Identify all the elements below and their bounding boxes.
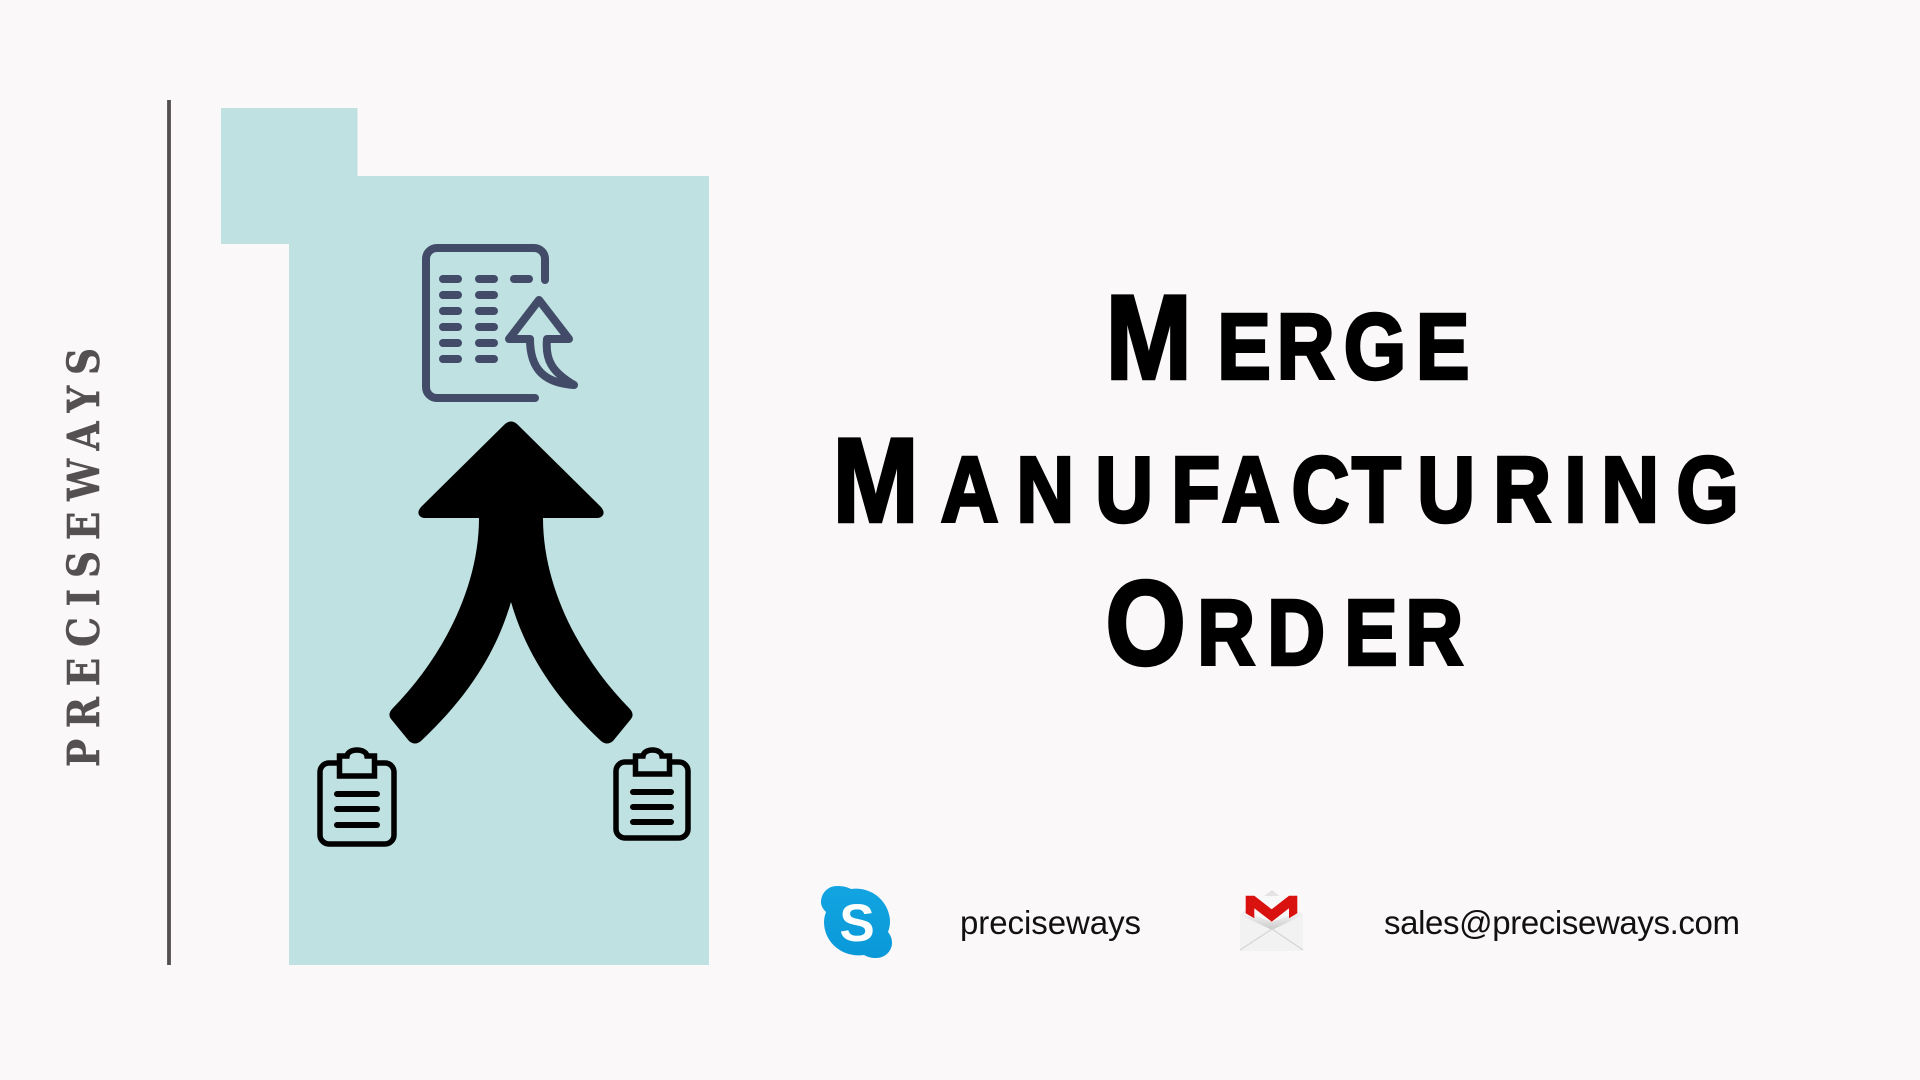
title: Merge Manufacturing Order: M	[833, 413, 919, 547]
icon: merging arrow	[389, 422, 633, 744]
title: Merge Manufacturing Order: M	[1106, 270, 1192, 404]
title: Merge Manufacturing Order: RDER	[1197, 581, 1463, 685]
contact: Skype handle: preciseways	[960, 904, 1141, 941]
icon: right clipboard	[616, 750, 688, 838]
brand name: PRECISEWAYS: PRECISEWAYS	[58, 348, 110, 767]
icon: Gmail envelope	[1240, 890, 1303, 951]
title: Merge Manufacturing Order: ERGE	[1217, 295, 1469, 399]
contact: email address: sales@preciseways.com	[1384, 904, 1740, 941]
icon: document with upload arrow	[426, 248, 574, 398]
icon: Skype logo: S	[839, 894, 875, 953]
title: Merge Manufacturing Order	[833, 270, 1739, 690]
icon: Skype logo	[821, 886, 892, 958]
panel: teal illustration background	[221, 108, 709, 965]
vertical divider line	[167, 100, 171, 965]
title: Merge Manufacturing Order: O	[1105, 556, 1186, 690]
title: Merge Manufacturing Order: ANUFACTURING	[941, 438, 1739, 542]
icon: left clipboard	[320, 750, 394, 844]
